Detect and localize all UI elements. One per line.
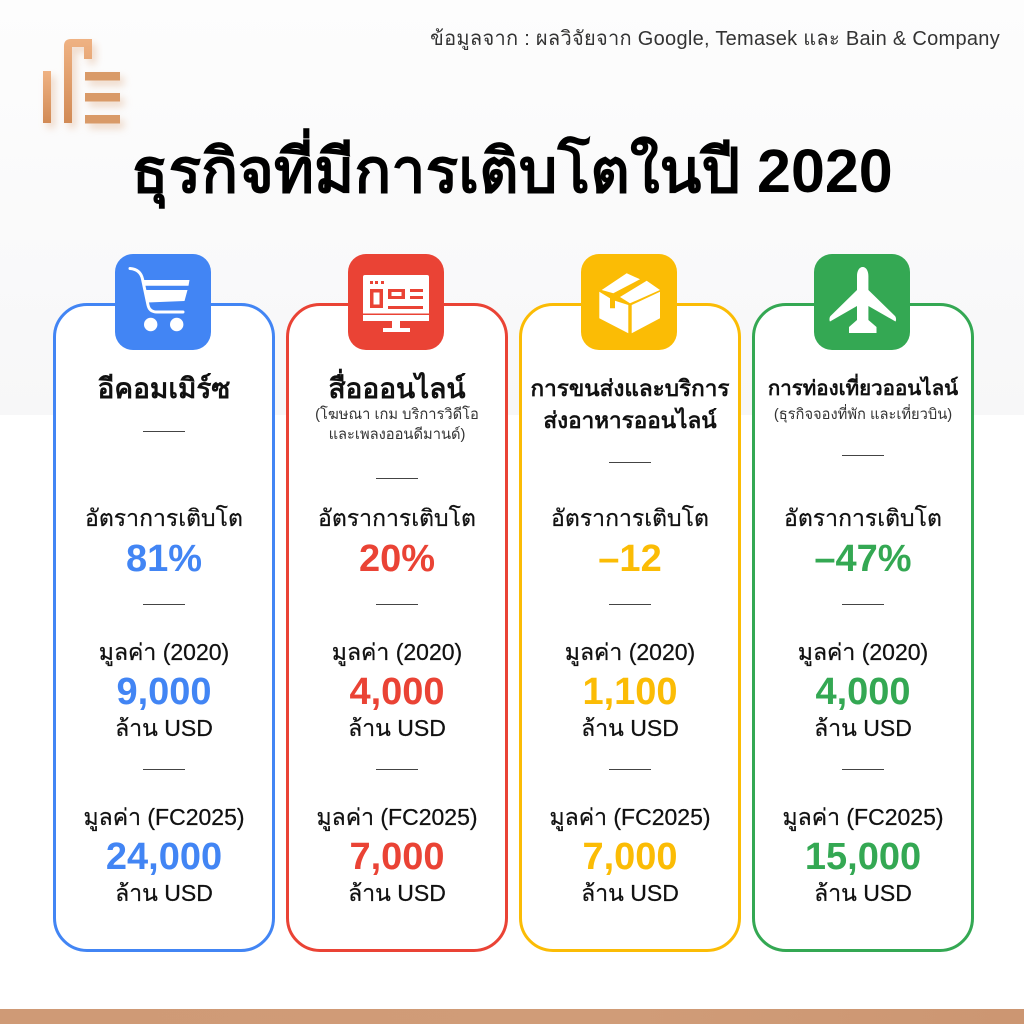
value 2020 label: มูลค่า (2020) — [565, 639, 695, 665]
unit: ล้าน USD — [115, 880, 213, 906]
panel: online media — [286, 254, 508, 952]
background band — [0, 0, 1024, 415]
growth value: –47% — [814, 538, 912, 580]
icon: logo — [43, 39, 127, 132]
unit: ล้าน USD — [814, 880, 912, 906]
value 2025 label: มูลค่า (FC2025) — [782, 804, 944, 830]
source note: ข้อมูลจาก : ผลวิจัยจาก Google, Temasek และ Bain & Company — [430, 28, 1000, 50]
value 2025: 15,000 — [805, 836, 921, 878]
growth value: 81% — [126, 538, 202, 580]
value 2020 label: มูลค่า (2020) — [798, 639, 928, 665]
value 2020: 4,000 — [815, 671, 911, 713]
heading — [531, 376, 730, 433]
heading: การขนส่งและบริการ — [531, 376, 729, 401]
value 2025: 7,000 — [582, 836, 678, 878]
heading: การท่องเที่ยวออนไลน์ — [768, 377, 958, 400]
growth label: อัตราการเติบโต — [784, 505, 942, 531]
subheading: (ธุรกิจจองที่พัก และเที่ยวบิน) — [774, 407, 952, 423]
heading: ส่งอาหารออนไลน์ — [543, 408, 717, 433]
icon: monitor — [348, 254, 444, 350]
value 2020: 1,100 — [582, 671, 678, 713]
value 2025 label: มูลค่า (FC2025) — [83, 804, 245, 830]
growth label: อัตราการเติบโต — [85, 505, 243, 531]
icon: airplane — [814, 254, 910, 350]
subheading — [315, 406, 479, 443]
icon: shopping cart — [115, 254, 211, 350]
unit: ล้าน USD — [814, 715, 912, 741]
growth label: อัตราการเติบโต — [318, 505, 476, 531]
panel: logistics and food delivery — [519, 254, 741, 952]
icon: parcel box — [581, 254, 677, 350]
footer bar — [0, 1009, 1024, 1024]
unit: ล้าน USD — [581, 715, 679, 741]
growth value: –12 — [598, 538, 662, 580]
card outline — [53, 303, 275, 952]
value 2025 label: มูลค่า (FC2025) — [316, 804, 478, 830]
growth value: 20% — [359, 538, 435, 580]
value 2020: 9,000 — [116, 671, 212, 713]
unit: ล้าน USD — [348, 880, 446, 906]
card outline — [752, 303, 974, 952]
unit: ล้าน USD — [115, 715, 213, 741]
value 2020: 4,000 — [349, 671, 445, 713]
heading: อีคอมเมิร์ซ — [98, 373, 230, 404]
heading: สื่อออนไลน์ — [328, 373, 466, 404]
value 2020 label: มูลค่า (2020) — [332, 639, 462, 665]
title: ธุรกิจที่มีการเติบโตในปี 2020 — [131, 137, 893, 205]
value 2025: 24,000 — [106, 836, 222, 878]
subheading: และเพลงออนดีมานด์) — [329, 427, 465, 443]
growth label: อัตราการเติบโต — [551, 505, 709, 531]
panel: online travel — [752, 254, 974, 952]
value 2020 label: มูลค่า (2020) — [99, 639, 229, 665]
unit: ล้าน USD — [581, 880, 679, 906]
value 2025: 7,000 — [349, 836, 445, 878]
card outline — [519, 303, 741, 952]
card outline — [286, 303, 508, 952]
unit: ล้าน USD — [348, 715, 446, 741]
value 2025 label: มูลค่า (FC2025) — [549, 804, 711, 830]
panel: e-commerce — [53, 254, 275, 952]
subheading: (โฆษณา เกม บริการวิดีโอ — [315, 407, 479, 423]
